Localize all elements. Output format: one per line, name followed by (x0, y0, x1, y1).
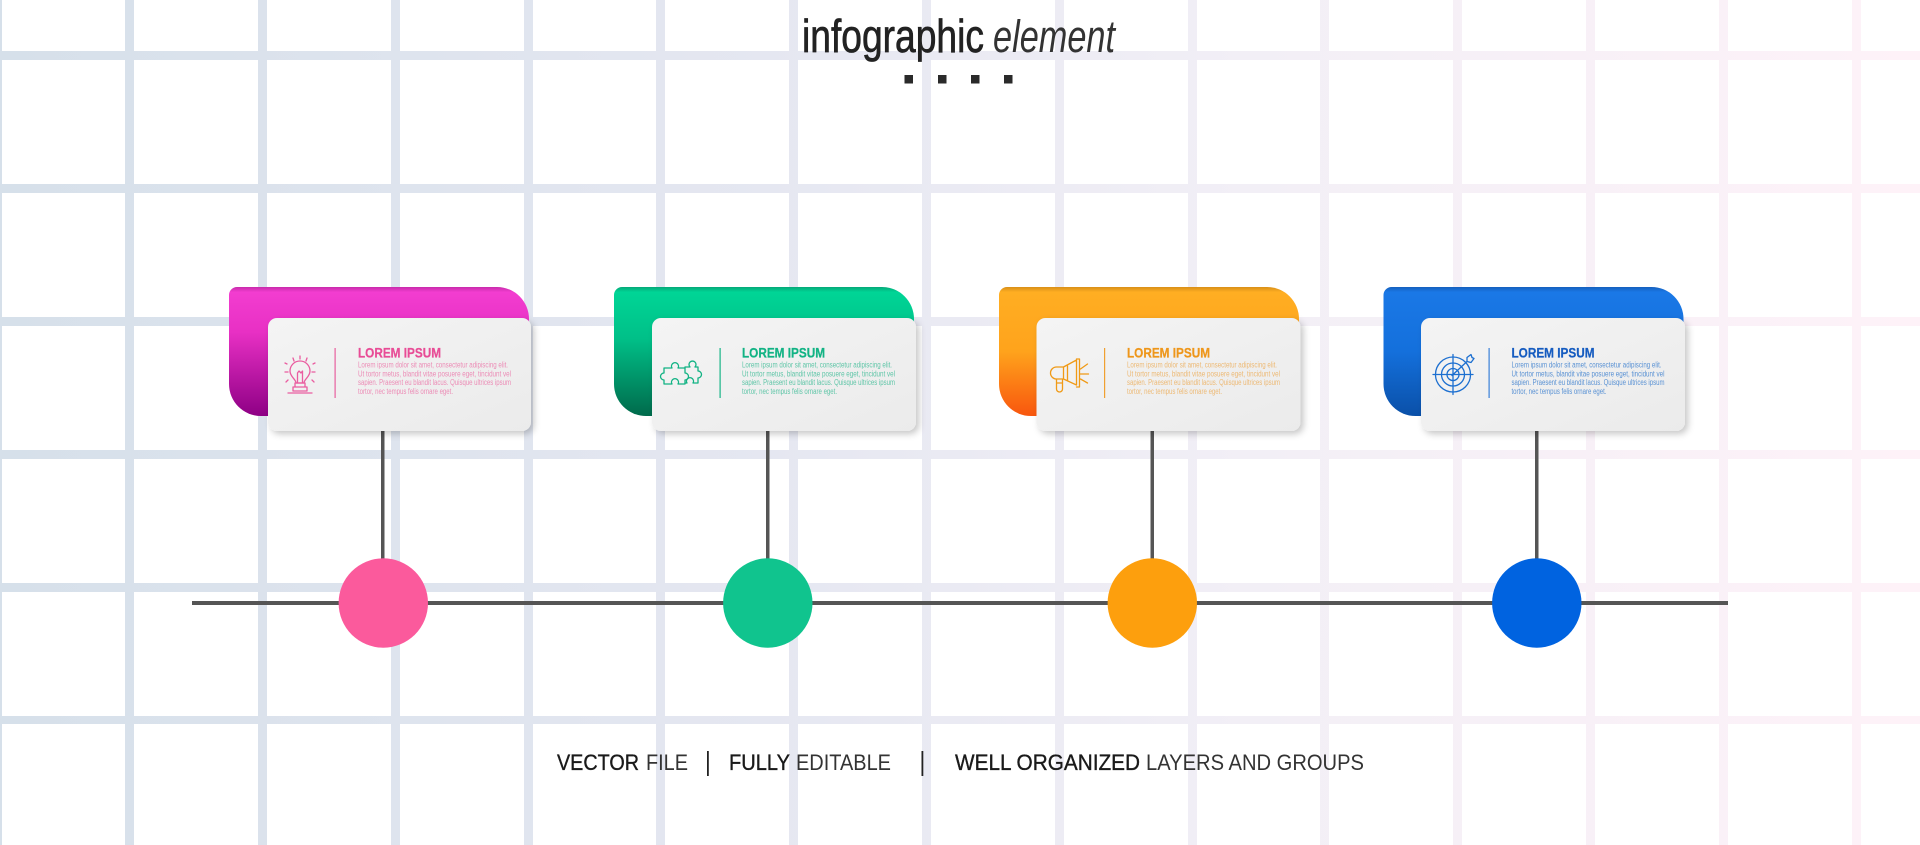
footer features: LAYERS AND GROUPS (1146, 750, 1364, 775)
connector stem 2 (766, 431, 770, 561)
card 1 (268, 318, 531, 431)
node 1 (339, 558, 428, 648)
body text 1: sapien. Praesent eu blandit lacus. Quisque ultrices ipsum (358, 378, 511, 387)
card 3 (1036, 318, 1300, 431)
body text 2: Lorem ipsum dolor sit amet, consectetur adipiscing elit. (742, 361, 892, 370)
back tab 1 (229, 287, 529, 416)
body text 1: Lorem ipsum dolor sit amet, consectetur adipiscing elit. (358, 361, 508, 370)
body text 4: Ut tortor metus, blandit vitae posuere eget, tincidunt vel (1512, 369, 1665, 378)
body text 3 (1127, 361, 1280, 396)
step 1: pink (229, 287, 531, 648)
title: infographic (802, 10, 984, 62)
body text 4: sapien. Praesent eu blandit lacus. Quisque ultrices ipsum (1512, 378, 1665, 387)
step 3: orange (999, 287, 1300, 648)
footer features (557, 750, 1364, 776)
node 4 (1492, 558, 1582, 648)
footer features: VECTOR (557, 750, 639, 775)
connector stem 4 (1535, 431, 1538, 561)
connector stem 3 (1150, 431, 1154, 561)
body text 2 (742, 361, 895, 396)
icon: megaphone (1050, 359, 1088, 392)
body text 3: tortor, nec tempus felis ornare eget. (1127, 387, 1222, 396)
step 2: green (614, 287, 916, 648)
divider 3 (1104, 348, 1105, 398)
title dots (904, 75, 1012, 84)
footer features: EDITABLE (796, 750, 891, 775)
footer features: WELL ORGANIZED (955, 750, 1140, 775)
node 2 (723, 558, 812, 648)
footer features: FULLY (729, 750, 790, 775)
heading 3: LOREM IPSUM (1127, 346, 1210, 360)
icon: target (1433, 354, 1474, 394)
back tab 2 (614, 287, 914, 416)
connector stem 1 (381, 431, 384, 561)
divider 2 (720, 348, 721, 398)
icon: puzzle (660, 361, 702, 384)
divider 1 (334, 348, 336, 398)
timeline axis (192, 601, 1728, 605)
card 2 (652, 318, 916, 431)
icon: light bulb (285, 356, 315, 393)
body text 3: Lorem ipsum dolor sit amet, consectetur adipiscing elit. (1127, 361, 1277, 370)
card 4 (1421, 318, 1685, 431)
body text 2: Ut tortor metus, blandit vitae posuere eget, tincidunt vel (742, 369, 895, 378)
body text 4: tortor, nec tempus felis ornare eget. (1512, 387, 1606, 396)
body text 2: sapien. Praesent eu blandit lacus. Quisque ultrices ipsum (742, 378, 895, 387)
node 3 (1108, 558, 1197, 648)
body text 1 (358, 361, 511, 396)
back tab 3 (999, 287, 1299, 416)
divider 4 (1488, 348, 1490, 398)
body text 2: tortor, nec tempus felis ornare eget. (742, 387, 837, 396)
title: element (993, 11, 1117, 62)
heading 4: LOREM IPSUM (1512, 346, 1594, 360)
footer features: FILE (646, 750, 688, 775)
heading 1: LOREM IPSUM (358, 346, 441, 360)
body text 1: tortor, nec tempus felis ornare eget. (358, 387, 453, 396)
body text 4 (1512, 361, 1665, 396)
body text 4: Lorem ipsum dolor sit amet, consectetur adipiscing elit. (1512, 361, 1662, 370)
body text 3: sapien. Praesent eu blandit lacus. Quisque ultrices ipsum (1127, 378, 1280, 387)
body text 1: Ut tortor metus, blandit vitae posuere eget, tincidunt vel (358, 369, 511, 378)
back tab 4 (1384, 287, 1684, 416)
heading 2: LOREM IPSUM (742, 346, 825, 360)
body text 3: Ut tortor metus, blandit vitae posuere eget, tincidunt vel (1127, 369, 1280, 378)
step 4: blue (1384, 287, 1685, 648)
